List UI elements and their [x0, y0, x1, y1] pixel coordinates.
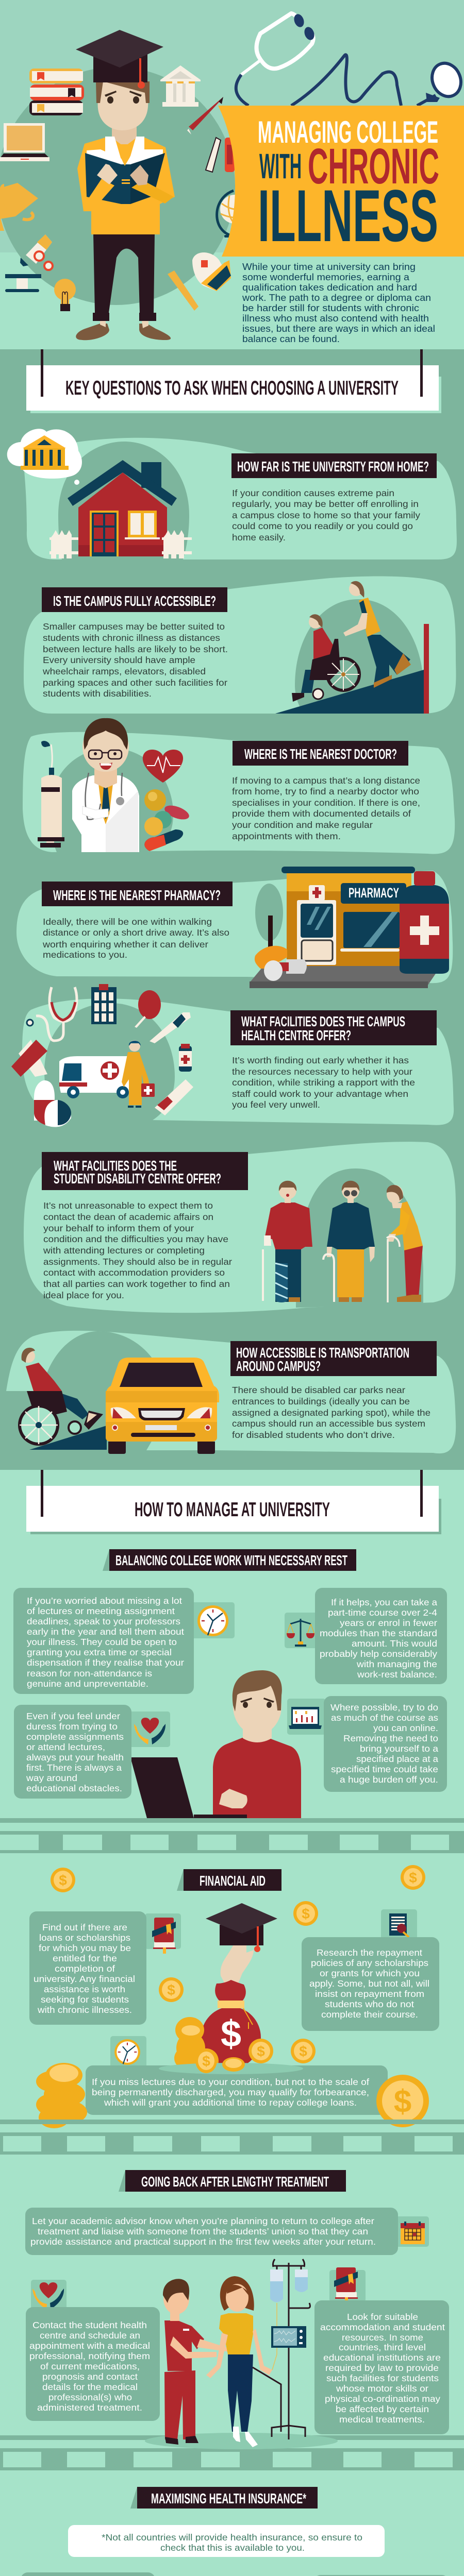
- callout: online study: bring yourself to a: [360, 1743, 438, 1754]
- body text: [232, 775, 420, 841]
- body text: provide them with documented details of: [232, 808, 411, 819]
- heading: WHAT FACILITIES DOES THE: [54, 1158, 177, 1174]
- body text: campus should run an accessible bus system: [232, 1418, 425, 1429]
- panel: student disability centre: [24, 1142, 456, 1313]
- background: header lower band: [0, 252, 464, 349]
- road divider 3: [0, 2435, 464, 2470]
- callout: missing lectures: If you’re worried about missing a lot: [27, 1596, 182, 1606]
- shoes: [76, 321, 171, 340]
- icon: pharmacy shop: [250, 867, 449, 988]
- body text: wheelchair ramps, elevators, disabled: [42, 666, 206, 676]
- callout: part-time course: with managing the: [356, 1659, 437, 1669]
- callout: part-time course: probably help considerably: [320, 1649, 437, 1659]
- body text: appointments with them.: [232, 831, 341, 841]
- callout: forbearance: being permanently discharged, you may qualify for forbearance,: [92, 2087, 369, 2097]
- callout: accommodation: educational institutions are: [323, 2352, 441, 2363]
- sweater: [77, 138, 175, 234]
- icon: pharmacy shop: PHARMACY: [349, 885, 399, 901]
- intro text: qualification takes dedication and hard: [242, 282, 417, 293]
- background: key questions section: [0, 349, 464, 1470]
- neck: [243, 1723, 272, 1742]
- icon: coins at top: [51, 1865, 425, 2002]
- callout: missing lectures: [13, 1588, 194, 1694]
- callout: student health centre: appointment with a medical: [29, 2341, 150, 2351]
- icon: standing books: [206, 138, 245, 172]
- callout: student health centre: of current medications,: [40, 2361, 140, 2371]
- callout: student health centre: [26, 2307, 160, 2421]
- body text: your condition and make regular: [232, 820, 373, 830]
- panel: campus accessibility: [24, 576, 456, 714]
- body text: a campus close to home so that your family: [232, 510, 420, 520]
- body text: If your condition causes extreme pain: [232, 488, 394, 498]
- dome: [295, 599, 423, 714]
- callout: academic advisor: [25, 2208, 398, 2255]
- body text: with attending lectures or completing: [43, 1245, 205, 1256]
- open book: [85, 144, 165, 204]
- icon: pencil: [187, 97, 223, 134]
- intro text: some wonderful memories, earning a: [242, 272, 410, 282]
- subheading: financial aid: [177, 1869, 281, 1891]
- body text: specialises in your condition. If there is one,: [232, 798, 420, 808]
- callout: insurance schemes: [313, 2575, 449, 2576]
- callout: student health centre: professional(s) who: [48, 2392, 132, 2402]
- callout: online study: Where possible, try to do: [330, 1702, 438, 1713]
- callout: health first: always put your health: [26, 1752, 124, 1762]
- icon: money bag: $: [221, 2013, 241, 2055]
- heading: STUDENT DISABILITY CENTRE OFFER?: [54, 1171, 221, 1187]
- callout: student health centre: details for the medical: [42, 2382, 138, 2392]
- intro text: issues, but there are ways in which an ideal: [242, 323, 435, 334]
- eyes: [240, 1698, 274, 1708]
- icon: trophy: [0, 183, 38, 231]
- callout: forbearance: [86, 2065, 388, 2115]
- body text: Every university should have ample: [43, 655, 195, 665]
- callout: loans and scholarships: entitled for the: [53, 1953, 117, 1963]
- callout: academic advisor: Let your academic advisor know when you’re planning to return to college after: [32, 2216, 374, 2226]
- callout: loans and scholarships: assistance is worth: [44, 1984, 125, 1994]
- head: [233, 1678, 281, 1735]
- icon: laptop: [0, 123, 49, 161]
- icons: medical items: [11, 984, 193, 1127]
- shadow ellipse and coins on top of callout: [159, 2048, 303, 2074]
- icon: heart with pulse: [143, 750, 183, 783]
- heading: AROUND CAMPUS?: [236, 1358, 321, 1374]
- callout: repayment policies: policies of any scholarships: [311, 1958, 428, 1968]
- orange band: [218, 106, 464, 257]
- callout: repayment policies: insist on repayment from: [315, 1989, 424, 1999]
- panel: campus health centre: [11, 984, 454, 1127]
- callout: repayment policies: apply. Some, but not all, will: [309, 1978, 429, 1989]
- stethoscope: [236, 13, 464, 106]
- callout: loans and scholarships: completion of: [55, 1963, 115, 1974]
- callout: student health centre: Contact the student health: [32, 2320, 147, 2330]
- callout: online study: as much of the course as: [331, 1713, 438, 1723]
- callout: loans and scholarships: Find out if there are: [42, 1922, 127, 1933]
- body text: condition and the difficulties you may have: [43, 1234, 228, 1244]
- intro text: be harder still for students with chronic: [242, 302, 419, 313]
- callout: health first: Even if you feel under: [26, 1711, 120, 1721]
- nurse: [163, 2279, 229, 2445]
- callout: missing lectures: granting you extra time or special: [27, 1647, 172, 1657]
- body text: home easily.: [232, 532, 286, 543]
- neck: [112, 126, 137, 147]
- callout: repayment policies: Research the repayment: [317, 1947, 422, 1958]
- callout: repayment policies: [302, 1937, 439, 2031]
- patient: [206, 2276, 281, 2447]
- dome: [44, 1003, 175, 1121]
- callout: loans and scholarships: loans or scholarships: [39, 1933, 130, 1943]
- heading: HEALTH CENTRE OFFER?: [241, 1027, 351, 1043]
- callout: loans and scholarships: university. Any financial: [34, 1974, 135, 1984]
- callout: missing lectures: early in the year and tell them about: [27, 1626, 184, 1637]
- callout: health first: [14, 1705, 170, 1799]
- title panel: WITH: [259, 146, 302, 186]
- blob: [6, 1331, 456, 1453]
- blob: [24, 576, 456, 714]
- body text: contact the dean of academic affairs on: [43, 1212, 213, 1222]
- background: header upper band: [0, 0, 464, 253]
- body text: [43, 1200, 232, 1300]
- icon: thought bubble with university: [7, 429, 82, 485]
- patient: [292, 614, 334, 702]
- banner: key questions: [26, 349, 441, 413]
- body text: regularly, you may be better off enrolling in: [232, 499, 419, 509]
- callout: academic advisor: provide assistance and practical support in the first few weeks after your return.: [30, 2236, 376, 2247]
- callout: accommodation: [314, 2300, 449, 2434]
- icon: clock tab: [110, 2036, 146, 2068]
- icon: stack of books: [29, 69, 84, 115]
- icon: wheelchair on ramp: [275, 581, 429, 714]
- body text: condition, while striking a rapport with the: [232, 1077, 415, 1088]
- callout: online study: [324, 1696, 447, 1792]
- subheading: maximising health insurance: [130, 2487, 318, 2509]
- icon: coin stacks by money bag: $: [202, 2053, 210, 2069]
- callout: forbearance: which will grant you additional time to repay college loans.: [104, 2097, 357, 2108]
- icon: book tab: [329, 2267, 366, 2303]
- icon: coins at top: $: [167, 1982, 175, 1998]
- hand: [219, 1789, 247, 1808]
- body text: between lecture halls are likely to be short.: [43, 644, 228, 654]
- subheading: going back: [119, 2170, 346, 2192]
- callout: repayment policies: students who do not: [325, 1999, 414, 2009]
- icon: wheelchair user: [20, 1348, 107, 1450]
- callout: health first: educational obstacles.: [26, 1783, 122, 1793]
- blob: [23, 732, 455, 854]
- icon: coin stack left: [36, 2063, 87, 2128]
- panel: nearest doctor: [23, 718, 455, 854]
- heading: [230, 1341, 437, 1376]
- graduation cap: [76, 30, 163, 89]
- IV stand: [270, 2259, 310, 2439]
- heading: [231, 453, 437, 478]
- callout: accommodation: resources. In some: [342, 2332, 423, 2343]
- body text: that all parties can work together to find an: [43, 1279, 230, 1289]
- icon: microscope: [5, 234, 53, 292]
- body text: from home, try to find a nearby doctor who: [232, 786, 419, 796]
- callout: check with university: [21, 2572, 155, 2576]
- body text: [232, 1055, 415, 1110]
- icon: university building: [160, 65, 201, 107]
- dome: [58, 442, 189, 560]
- hair: [233, 1670, 282, 1711]
- intro text: work. The path to a degree or diploma can: [242, 292, 431, 303]
- icon: calendar tab: [395, 2216, 429, 2247]
- callout: accommodation: medical treatments.: [339, 2414, 425, 2425]
- callout: missing lectures: reason for non-attendance is: [27, 1668, 152, 1679]
- callout: online study: specified time could take: [331, 1764, 438, 1774]
- callout: accommodation: such facilities for students: [326, 2373, 439, 2383]
- callout: accommodation: Look for suitable: [347, 2312, 418, 2322]
- body text: the resources necessary to help with your: [232, 1066, 412, 1077]
- body text: [232, 488, 420, 543]
- body text: assignments. They should also be in regular: [43, 1257, 232, 1267]
- heading: [233, 741, 408, 766]
- icon: coins at top: $: [302, 1906, 310, 1922]
- callout: health first: way around: [26, 1773, 77, 1783]
- body text: If moving to a campus that’s a long distance: [232, 775, 420, 786]
- body text: parking spaces and other such facilities for: [43, 677, 227, 688]
- sweater: [213, 1738, 301, 1818]
- body text: worth enquiring whether it can deliver: [42, 939, 208, 950]
- body text: Ideally, there will be one within walking: [43, 917, 212, 927]
- body text: entrances to buildings (ideally you can be: [232, 1396, 410, 1406]
- backdrop circle: [0, 67, 235, 305]
- blob: [22, 998, 454, 1125]
- icon: ambulance: [59, 1056, 130, 1098]
- icon: house: [49, 460, 192, 558]
- body text: for disabled students who don’t drive.: [232, 1430, 395, 1440]
- callout: health first: duress from trying to: [26, 1721, 118, 1732]
- body text: contact with accommodation providers so: [43, 1267, 225, 1278]
- blob: [24, 1142, 456, 1313]
- body text: assigned a designated parking spot), while the: [232, 1408, 430, 1418]
- icon: yellow car: [106, 1358, 219, 1454]
- callout: online study: you can online.: [373, 1723, 438, 1733]
- icon: money bag: [201, 1980, 261, 2069]
- callout: student health centre: prognosis and contact: [42, 2371, 138, 2382]
- callout: missing lectures: your illness. They could be open to: [27, 1637, 177, 1647]
- callout: accommodation: accommodation and student: [320, 2322, 445, 2332]
- callout: part-time course: If it helps, you can take a: [331, 1597, 437, 1607]
- icon: coin stacks by money bag: $: [299, 2043, 307, 2059]
- shadow ellipse and coins on top of callout: $: [202, 2053, 210, 2069]
- callout: accommodation: whose motor skills or: [336, 2383, 428, 2394]
- subheading: maximising health insurance: MAXIMISING HEALTH INSURANCE*: [151, 2490, 306, 2506]
- callout: missing lectures: of lectures or meeting assignment: [27, 1606, 175, 1616]
- body text: distance or only a short drive away. It’s also: [43, 927, 229, 938]
- intro text: [242, 261, 435, 344]
- callout: missing lectures: deadlines, speak to your professors: [27, 1616, 180, 1626]
- header illustration: [0, 30, 249, 340]
- icon: clock tab: [186, 1602, 235, 1638]
- heading: [230, 1010, 437, 1045]
- callout: online study: Removing the need to: [343, 1733, 438, 1743]
- road divider 2: [0, 2120, 464, 2155]
- callout: missing lectures: genuine and unpreventable.: [27, 1679, 148, 1689]
- callout: loans and scholarships: [29, 1911, 146, 2025]
- icon: syringe: [38, 741, 64, 848]
- panel: transportation: [6, 1331, 456, 1454]
- blob: [24, 438, 457, 560]
- ground ellipse: [145, 2433, 338, 2449]
- intro text: balance can be found.: [242, 333, 340, 344]
- callout: accommodation: be affected by certain: [336, 2404, 429, 2414]
- graduation cap and hand: [206, 1903, 277, 1984]
- icon: large coin right: [376, 2075, 429, 2127]
- figure: older person with walking stick: [387, 1185, 423, 1302]
- callout: online study: specified place at a: [356, 1754, 438, 1764]
- callout: repayment policies: or grants for which you: [320, 1968, 420, 1978]
- callout: accommodation: physical co-ordination may: [325, 2394, 440, 2404]
- icon: coins at top: $: [59, 1872, 67, 1888]
- hair: [96, 81, 150, 103]
- callout: loans and scholarships: with chronic illnesses.: [37, 2005, 132, 2015]
- doctor: [72, 718, 139, 852]
- intro text: illness who must also contend with health: [242, 313, 429, 324]
- icon: large coin right: $: [394, 2084, 411, 2120]
- blob: [16, 871, 453, 983]
- icon: pills: [144, 789, 191, 851]
- icon: heart hands tab: [31, 2280, 67, 2311]
- body text: [232, 1385, 430, 1440]
- worried student at laptop: [130, 1670, 301, 1818]
- panel: distance from home: [7, 429, 457, 560]
- body text: [42, 917, 229, 960]
- body text: medications to you.: [43, 950, 127, 960]
- banner: how to manage: HOW TO MANAGE AT UNIVERSITY: [135, 1499, 330, 1521]
- note: availability of insurance: *Not all countries will provide health insurance, so ensure to: [102, 2532, 362, 2543]
- callout: student health centre: administered treatment.: [37, 2402, 142, 2413]
- heading: IS THE CAMPUS FULLY ACCESSIBLE?: [53, 593, 216, 609]
- heading: [42, 587, 227, 612]
- subheading: balancing college work: [103, 1549, 356, 1571]
- icon: repayment document tab: [381, 1909, 417, 1940]
- callout: part-time course: years or enrol in fewer: [340, 1618, 437, 1628]
- banner: how to manage: [26, 1470, 441, 1534]
- callout: part-time course: [315, 1588, 447, 1684]
- callout: part-time course: amount. This would: [352, 1638, 437, 1649]
- icon: backpack: [192, 252, 231, 291]
- laptop: [130, 1757, 247, 1818]
- icon: coins at top: $: [409, 1870, 417, 1886]
- callout: accommodation: countries, third level: [339, 2342, 426, 2352]
- icon: coin stacks by money bag: [174, 2017, 316, 2073]
- callout: missing lectures: dispensation if they realise that your: [27, 1657, 184, 1668]
- callout: repayment policies: complete their course.: [321, 2009, 418, 2020]
- body text: It’s not unreasonable to expect them to: [43, 1200, 213, 1211]
- callout: online study: a huge burden off you.: [340, 1774, 438, 1785]
- body text: could come to you readily or you could go: [232, 521, 413, 531]
- icon: ruler: [168, 270, 198, 311]
- icon: scales tab: [285, 1613, 321, 1648]
- eyes: [105, 91, 142, 104]
- body text: you feel very unwell.: [232, 1099, 320, 1110]
- dome: [51, 748, 173, 852]
- icon: globe: [217, 191, 249, 238]
- body text: staff could work to your advantage when: [232, 1089, 408, 1099]
- callout: part-time course: part-time course over 2-4: [328, 1607, 437, 1618]
- body text: It’s worth finding out early whether it has: [232, 1055, 409, 1065]
- callout: health first: or attend lectures,: [26, 1742, 105, 1752]
- callout: health first: complete assignments: [26, 1732, 124, 1742]
- body text: Smaller campuses may be better suited to: [43, 621, 225, 632]
- dome: [44, 1331, 160, 1394]
- intro text: While your time at university can bring: [242, 261, 416, 272]
- figure: person with crutch and leg cast: [263, 1181, 312, 1302]
- nurse and patient with IV stand: [163, 2259, 310, 2447]
- callout: part-time course: work-rest balance.: [357, 1669, 437, 1680]
- body text: [42, 621, 228, 699]
- heading: [42, 1152, 248, 1190]
- hands and sleeves: [85, 164, 174, 211]
- figure: blind person with cane: [323, 1181, 375, 1302]
- student: [76, 30, 175, 340]
- heading: [42, 882, 233, 906]
- title panel: [218, 106, 464, 257]
- body text: ideal place for you.: [43, 1290, 124, 1300]
- legs: [93, 234, 155, 313]
- icon: light bulb: [54, 279, 76, 311]
- wheelchair: [309, 639, 359, 699]
- callout: accommodation: required by law to provide: [325, 2363, 439, 2373]
- body text: students with disabilities.: [43, 688, 152, 699]
- head: [98, 82, 148, 130]
- callout: health first: first. There is always a: [26, 1762, 122, 1773]
- note: availability of insurance: check that this is available to you.: [160, 2543, 305, 2553]
- callout: part-time course: modules than the standard: [320, 1628, 437, 1638]
- subheading: going back: GOING BACK AFTER LENGTHY TREATMENT: [141, 2174, 329, 2190]
- cuffs: [93, 313, 156, 321]
- icon: coin stacks by money bag: $: [257, 2043, 265, 2059]
- panel: nearest pharmacy: [16, 867, 453, 988]
- note: availability of insurance: [68, 2525, 385, 2557]
- icon: laptop tab: [287, 1699, 326, 1735]
- collar and tie: [105, 137, 144, 165]
- carer: [343, 581, 411, 688]
- callout: loans and scholarships: for which you may be: [39, 1943, 131, 1953]
- callout: forbearance: If you miss lectures due to your condition, but not to the scale of: [92, 2077, 369, 2087]
- icon: book tab: [145, 1913, 181, 1954]
- body text: There should be disabled car parks near: [232, 1385, 405, 1395]
- body text: your behalf to inform them of your: [43, 1223, 194, 1233]
- road divider 1: [0, 1818, 464, 1853]
- subheading: financial aid: FINANCIAL AID: [200, 1873, 266, 1889]
- background: how to manage section: [0, 1470, 464, 2576]
- callout: student health centre: centre and schedule an: [40, 2330, 140, 2341]
- callout: student health centre: professional, notifying them: [29, 2351, 150, 2361]
- heading: WHERE IS THE NEAREST PHARMACY?: [53, 887, 221, 903]
- body text: students with chronic illness as distances: [43, 633, 220, 643]
- icon: paramedic: [122, 1040, 155, 1108]
- callout: loans and scholarships: seeking for students: [41, 1994, 129, 2005]
- dome: [296, 1168, 423, 1308]
- callout: academic advisor: treatment and liaise with someone from the students’ union so that they can: [38, 2226, 368, 2236]
